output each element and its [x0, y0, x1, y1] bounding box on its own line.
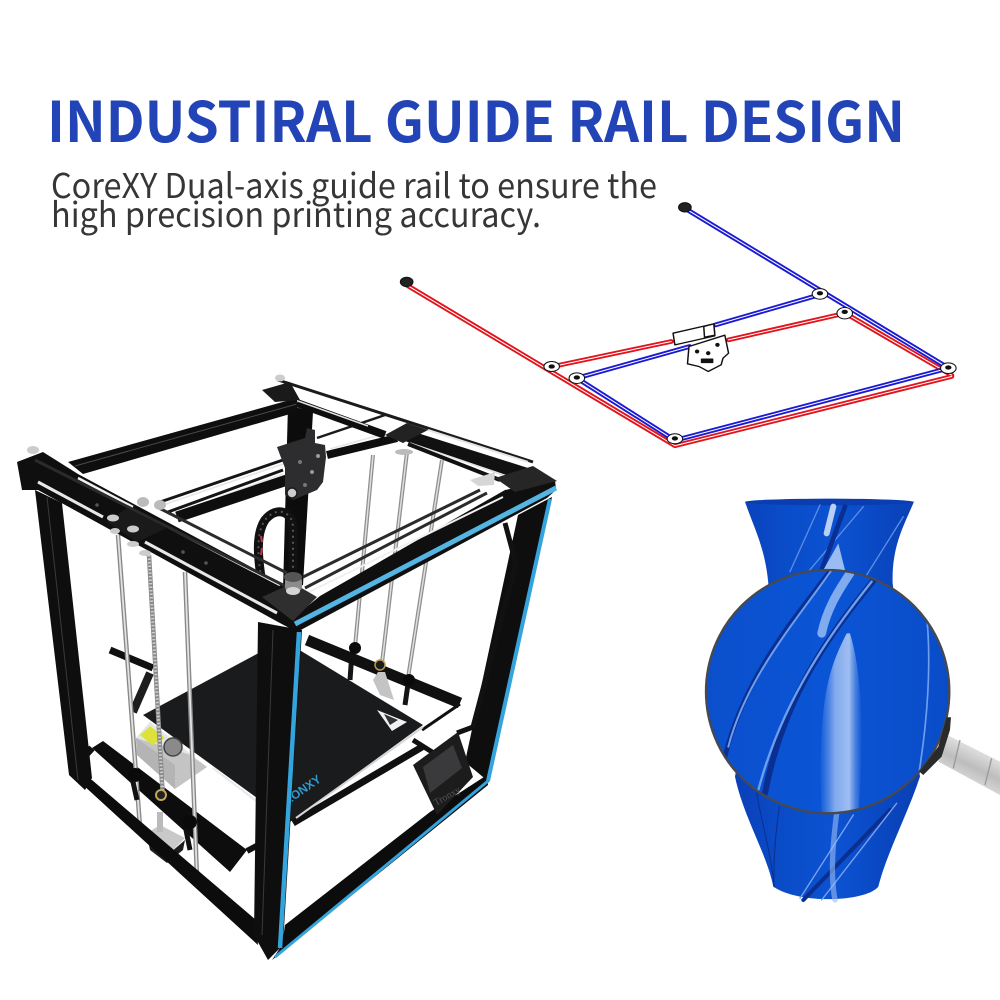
- vase with magnifier: [706, 499, 1000, 900]
- bed logo triangle: [377, 710, 407, 731]
- rear-right top rails: [278, 380, 533, 480]
- right-front top rail: [293, 466, 557, 632]
- cable chain: [258, 512, 293, 590]
- x carriage plate: [277, 428, 326, 500]
- front corner post: [254, 622, 302, 960]
- rear-left top rail: [68, 398, 297, 474]
- red belt: [405, 284, 952, 446]
- print bed: [143, 640, 423, 822]
- rear rods: [350, 452, 442, 705]
- title: INDUSTIRAL GUIDE RAIL DESIGN: [47, 78, 905, 159]
- left Y bar of bed: [92, 741, 262, 872]
- right corner post: [457, 497, 552, 782]
- front stepper motor: [147, 812, 185, 863]
- magnifier clasp: [919, 717, 951, 775]
- left-front top rail: [17, 452, 297, 632]
- carriage: [673, 324, 729, 371]
- back post: [283, 405, 313, 590]
- rear stepper motor: [373, 672, 394, 700]
- bed Y frame: [110, 640, 460, 823]
- subtitle text: high precision printing accuracy.: [51, 188, 541, 237]
- pulleys: [400, 203, 956, 444]
- rear-left top corner: [262, 382, 300, 402]
- bottom right rail: [272, 775, 488, 960]
- bed brand text: RONXY: [281, 772, 324, 808]
- magnifier lens: [706, 570, 949, 817]
- control screen: [413, 732, 473, 815]
- subtitle text: [51, 159, 657, 237]
- front pulley: [284, 572, 302, 595]
- subtitle text: CoreXY Dual-axis guide rail to ensure the: [51, 159, 657, 208]
- blue belt: [577, 208, 949, 440]
- control screen: Tronxy: [432, 785, 463, 809]
- left corner post: [35, 490, 92, 790]
- gantry rails right of carriage: [317, 415, 397, 455]
- vase neck ridges: [757, 505, 903, 900]
- 3D printer: [17, 374, 557, 960]
- front corner plate: [262, 583, 317, 621]
- vase body: [735, 502, 920, 899]
- gantry rails left of carriage: [160, 460, 287, 517]
- vase top rim: [745, 499, 914, 505]
- bottom left rail: [70, 773, 258, 945]
- rear-right mid plate: [385, 423, 428, 443]
- front rods: [118, 535, 197, 877]
- bottom rear-left rail: [72, 748, 92, 770]
- magnifier handle: [938, 735, 1000, 795]
- CoreXY belt diagram: [400, 203, 956, 446]
- power supply: [136, 722, 207, 789]
- left center plate: [27, 374, 495, 556]
